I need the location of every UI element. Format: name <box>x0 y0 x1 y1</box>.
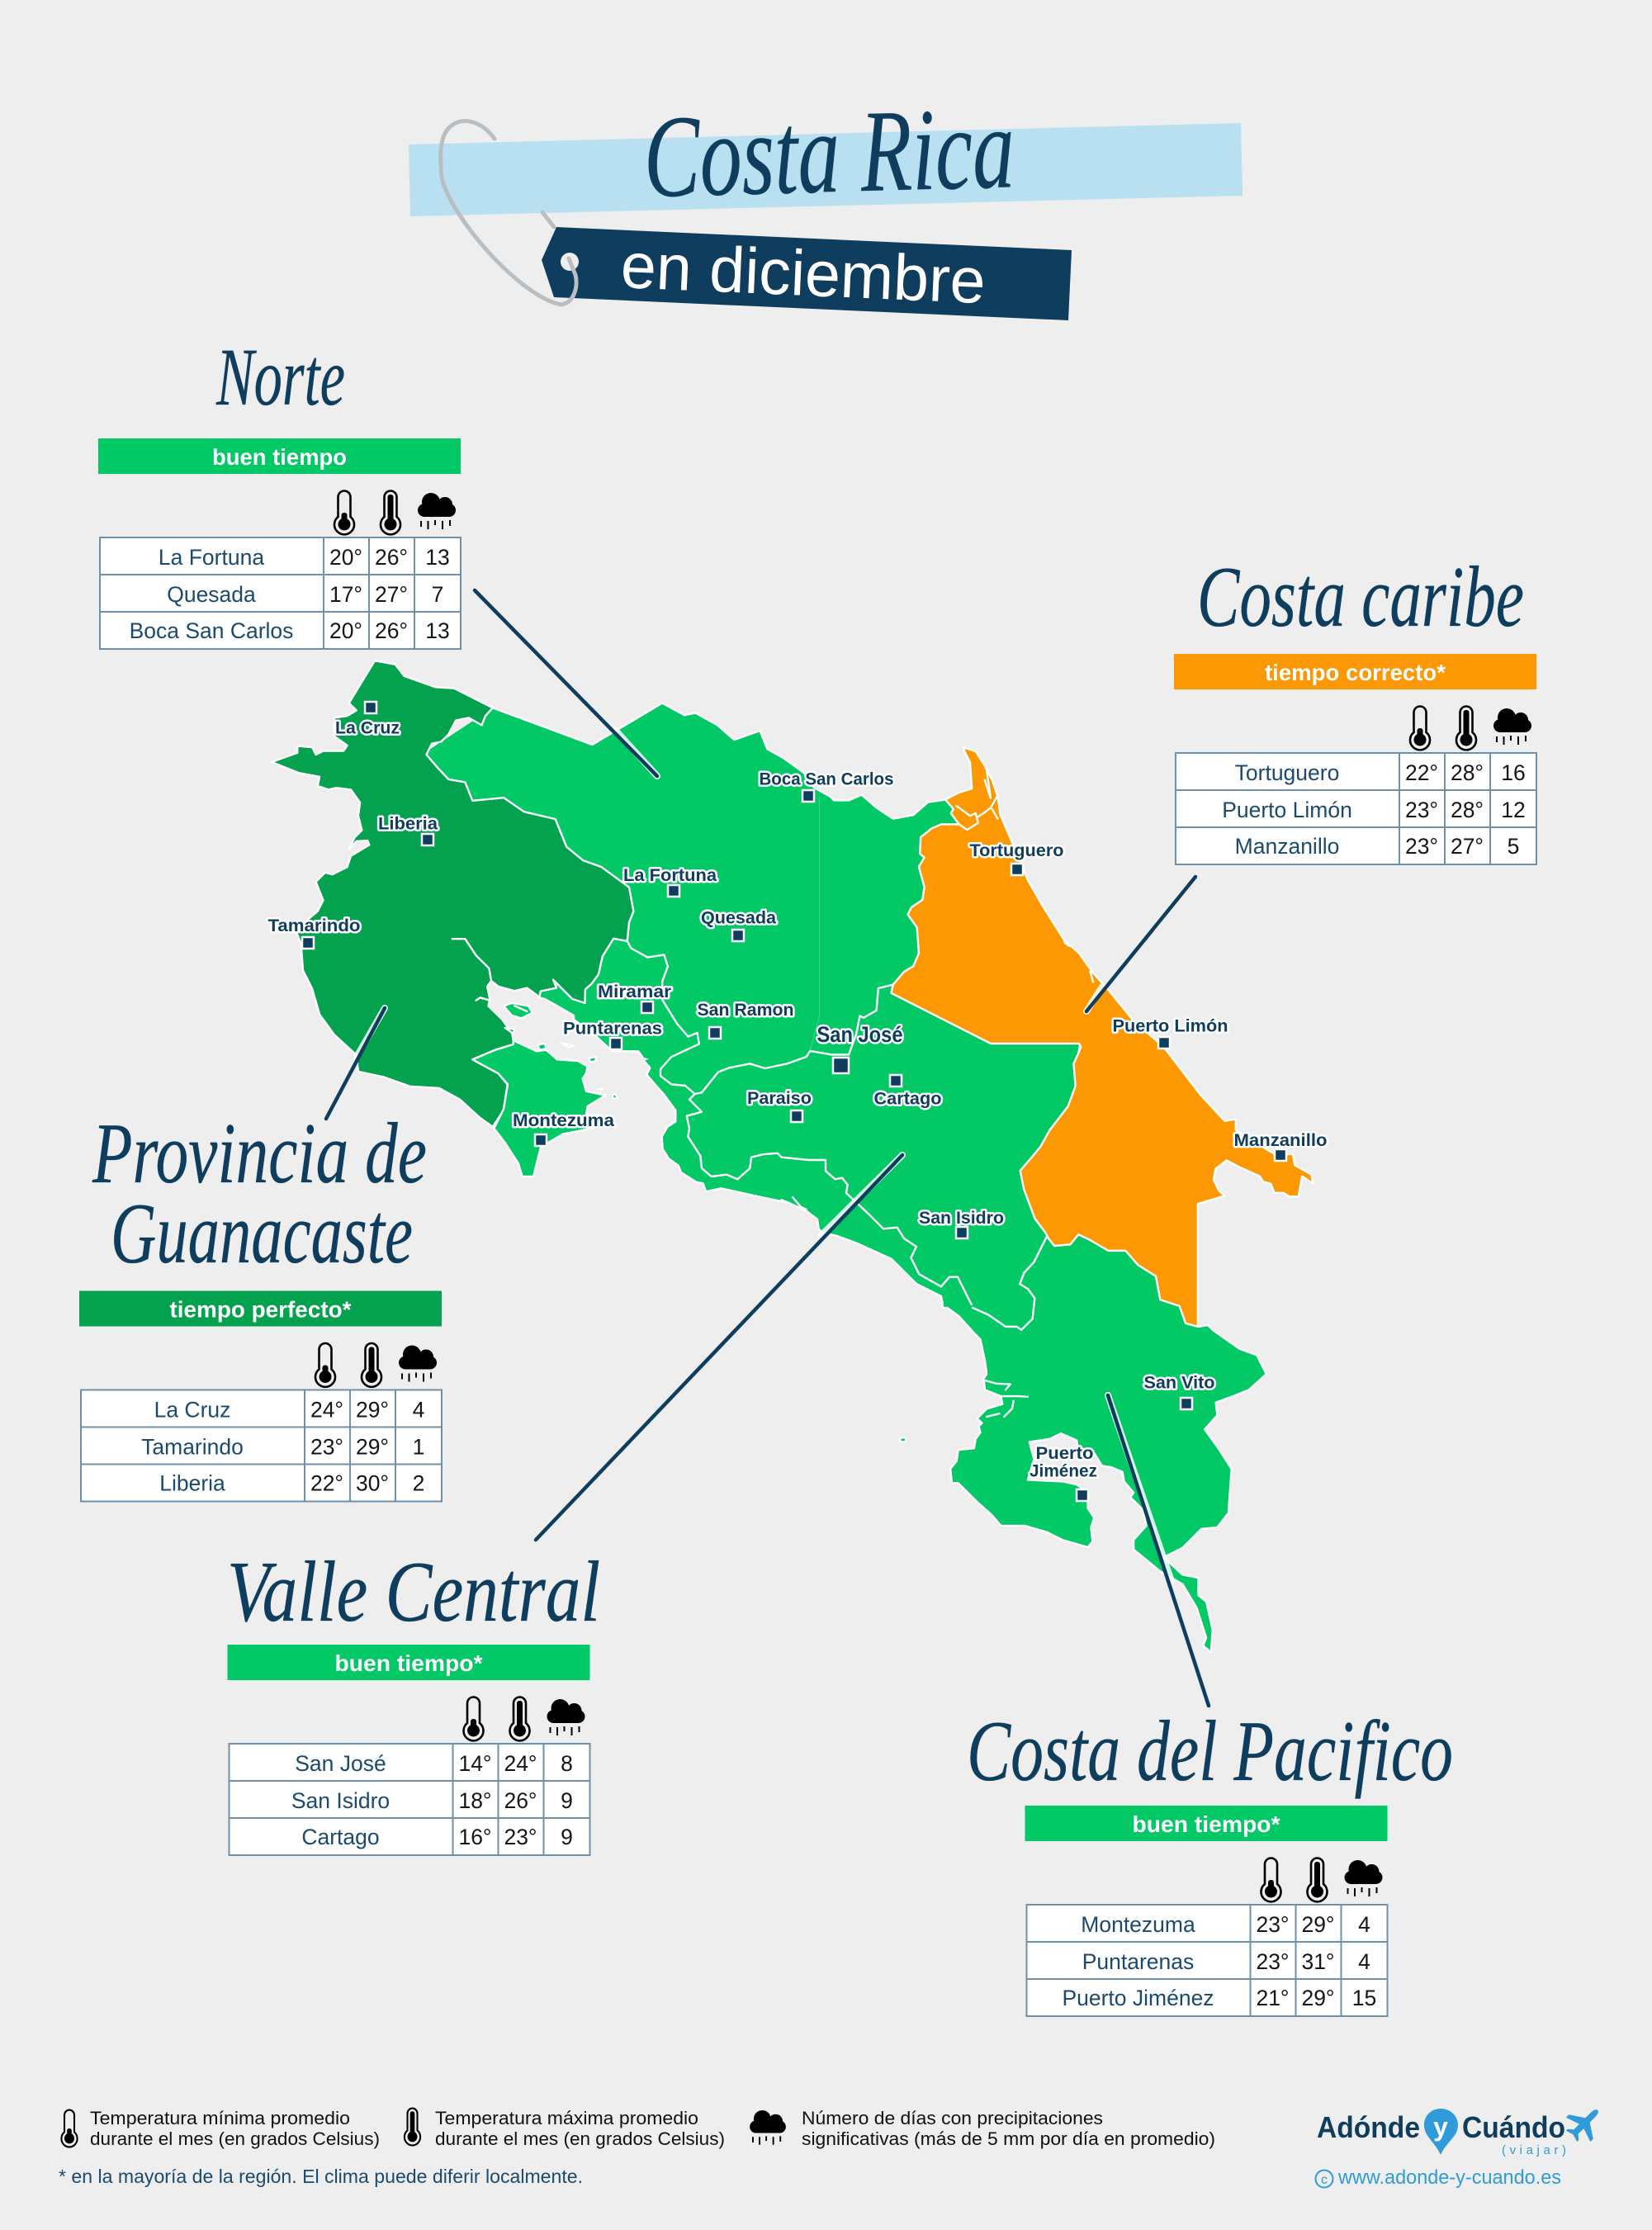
table: 26° <box>375 545 408 570</box>
website: www.adonde-y-cuando.es <box>1337 2166 1561 2189</box>
legend: rain text <box>802 2108 1215 2149</box>
heading: Valle Central: Valle Central <box>227 1543 600 1640</box>
labels: San José <box>817 1022 903 1047</box>
legend: minimum temperature text: durante el mes (en grados Celsius) <box>90 2128 380 2149</box>
title: Costa Rica: Costa Rica <box>642 82 1016 222</box>
heading: Provincia de Guanacaste: Guanacaste <box>111 1185 413 1281</box>
region: Nicoya tip and gulf islands <box>472 997 618 1177</box>
panel body: Valle Central <box>228 1645 589 1855</box>
region: green land silhouette <box>424 703 1266 1652</box>
table: 4 <box>413 1397 424 1422</box>
callout lines <box>326 590 1209 1706</box>
legend <box>59 2108 1215 2187</box>
heading: Norte: Norte <box>215 331 345 423</box>
logo: Adónde y Cuándo <box>1316 2098 1610 2189</box>
labels: Cartago <box>873 1088 941 1108</box>
table: 9 <box>561 1825 573 1849</box>
legend: rain text: Número de días con precipitaciones <box>802 2108 1103 2128</box>
table: 4 <box>1358 1949 1370 1974</box>
table: 28° <box>1451 760 1484 785</box>
table: 16° <box>458 1825 492 1849</box>
logo word: Cuándo: Cuándo <box>1462 2110 1565 2144</box>
logo word: Adónde: Adónde <box>1317 2110 1420 2144</box>
legend: minimum temperature text <box>90 2108 380 2149</box>
table: Cartago <box>301 1825 380 1849</box>
table: 23° <box>1256 1949 1290 1974</box>
banner: tiempo correcto: tiempo correcto* <box>1265 660 1446 685</box>
labels <box>267 718 1328 1481</box>
labels: San Ramon <box>697 1000 794 1020</box>
labels: Manzanillo <box>1233 1130 1328 1150</box>
table: Puerto Jiménez <box>1062 1986 1214 2010</box>
labels: Jiménez <box>1030 1461 1097 1481</box>
table: 9 <box>561 1788 573 1813</box>
table: 22° <box>310 1471 343 1496</box>
labels: Liberia <box>378 814 438 834</box>
legend: maximum temperature text: durante el mes (en grados Celsius) <box>435 2128 725 2149</box>
table: 26° <box>375 618 408 643</box>
banner: buen tiempo: buen tiempo* <box>335 1650 483 1676</box>
table: La Cruz <box>154 1397 230 1422</box>
icon: plane <box>1560 2098 1610 2148</box>
map of Costa Rica <box>272 660 1314 1652</box>
legend: rain text: significativas (más de 5 mm por día en promedio) <box>802 2128 1215 2149</box>
labels: Montezuma <box>513 1110 615 1130</box>
table: Manzanillo <box>1235 834 1339 859</box>
labels: La Cruz <box>335 718 400 738</box>
banner: buen tiempo <box>98 438 461 474</box>
table: 30° <box>356 1471 389 1496</box>
labels: Tamarindo <box>267 916 360 935</box>
labels: Quesada <box>701 908 777 928</box>
labels: Puerto Limón <box>1113 1016 1228 1035</box>
labels: Puerto <box>1035 1443 1093 1463</box>
banner: buen tiempo: buen tiempo* <box>1133 1811 1280 1837</box>
legend: maximum temperature icon <box>405 2109 420 2146</box>
banner: buen tiempo <box>228 1645 589 1680</box>
table: 27° <box>1451 834 1484 859</box>
banner: tiempo perfecto <box>79 1291 442 1326</box>
table: 23° <box>1256 1912 1290 1937</box>
table: 14° <box>458 1751 492 1776</box>
labels: La Fortuna <box>623 865 717 885</box>
table: 5 <box>1508 834 1519 859</box>
table: Montezuma <box>1081 1912 1195 1937</box>
labels: Puntarenas <box>563 1019 662 1039</box>
panel body: Costa del Pacifico <box>1025 1806 1387 2016</box>
region: green coast and border lines <box>493 703 1266 1652</box>
legend: minimum temperature icon <box>61 2110 78 2147</box>
table: 22° <box>1405 760 1438 785</box>
heading: Provincia de Guanacaste <box>92 1105 427 1281</box>
heading: Provincia de Guanacaste: Provincia de <box>92 1105 427 1201</box>
table: Puerto Limón <box>1222 798 1352 822</box>
city markers and labels <box>267 702 1328 1501</box>
heading: Costa caribe: Costa caribe <box>1197 548 1524 645</box>
table: 29° <box>1301 1986 1335 2010</box>
banner: buen tiempo: buen tiempo <box>212 444 347 470</box>
table: 21° <box>1256 1986 1290 2010</box>
table: Quesada <box>167 582 256 607</box>
table: 8 <box>561 1751 573 1776</box>
banner: buen tiempo <box>1025 1806 1387 1841</box>
table: 24° <box>310 1397 343 1422</box>
table <box>230 1744 589 1855</box>
table: 13 <box>425 545 450 570</box>
table <box>1176 753 1536 864</box>
table: 1 <box>413 1435 424 1460</box>
table: 27° <box>375 582 408 607</box>
table: 7 <box>432 582 443 607</box>
weather icons <box>334 490 456 534</box>
table: 29° <box>356 1435 389 1460</box>
table: 23° <box>1405 834 1438 859</box>
table: San José <box>295 1751 386 1776</box>
table: La Fortuna <box>159 545 264 570</box>
table: 26° <box>504 1788 537 1813</box>
table: San Isidro <box>291 1788 390 1813</box>
panel: Valle Central <box>227 1543 600 1855</box>
table: 13 <box>425 618 450 643</box>
markers <box>302 702 1286 1501</box>
line: Guanacaste <box>326 1008 385 1119</box>
legend: maximum temperature text <box>435 2108 725 2149</box>
table: 31° <box>1301 1949 1335 1974</box>
weather icons <box>464 1697 585 1740</box>
copyright mark: c <box>1321 2173 1328 2187</box>
labels: San Isidro <box>919 1208 1004 1228</box>
weather icons <box>1261 1858 1382 1901</box>
icon: location pin <box>1424 2109 1458 2155</box>
line: Valle Central <box>536 1155 902 1540</box>
table <box>100 537 461 649</box>
table: Liberia <box>159 1471 225 1496</box>
table: 23° <box>504 1825 537 1849</box>
table: 16 <box>1501 760 1526 785</box>
table: 23° <box>310 1435 343 1460</box>
heading: Costa del Pacifico: Costa del Pacifico <box>967 1702 1453 1799</box>
tag string <box>441 121 576 305</box>
line halos over the map <box>357 731 1172 1581</box>
labels: Miramar <box>598 982 672 1001</box>
icon: location pin: y <box>1433 2112 1448 2142</box>
weather icons <box>315 1343 437 1387</box>
table <box>81 1390 442 1501</box>
panel body: Guanacaste <box>79 1291 442 1501</box>
table <box>1027 1905 1387 2016</box>
table: Puntarenas <box>1082 1949 1194 1974</box>
footnote: * en la mayoría de la región. El clima puede diferir localmente. <box>59 2166 583 2187</box>
region: Guanacaste dark green <box>272 660 633 1127</box>
table: Tamarindo <box>141 1435 244 1460</box>
table: 4 <box>1358 1912 1370 1937</box>
legend: rain icon <box>750 2110 786 2145</box>
copyright mark <box>1316 2170 1332 2188</box>
table: 12 <box>1501 798 1526 822</box>
subtitle tag <box>542 227 1072 320</box>
labels: San Vito <box>1144 1372 1215 1392</box>
legend: minimum temperature text: Temperatura mínima promedio <box>90 2108 350 2128</box>
labels: Paraiso <box>747 1088 812 1108</box>
table: 2 <box>413 1471 424 1496</box>
table: 23° <box>1405 798 1438 822</box>
table: 15 <box>1352 1986 1376 2010</box>
table: 20° <box>329 618 362 643</box>
labels: Tortuguero <box>969 840 1063 860</box>
panel body: Costa caribe <box>1174 654 1536 864</box>
panel: Provincia de Guanacaste <box>79 1105 442 1501</box>
panel: Norte <box>98 331 461 649</box>
table: 18° <box>458 1788 492 1813</box>
table: 29° <box>1301 1912 1335 1937</box>
weather icons <box>1410 707 1531 750</box>
legend: maximum temperature text: Temperatura máxima promedio <box>435 2108 698 2128</box>
table: 20° <box>329 545 362 570</box>
line: Costa del Pacifico <box>1108 1395 1209 1706</box>
title band <box>409 123 1243 216</box>
region: Costa caribe orange <box>891 747 1314 1327</box>
banner: tiempo correcto <box>1174 654 1536 689</box>
table: 29° <box>356 1397 389 1422</box>
logo tagline: (viajar) <box>1502 2143 1566 2157</box>
line: Norte <box>475 590 657 776</box>
panel: Costa caribe <box>1174 548 1536 864</box>
banner: tiempo perfecto: tiempo perfecto* <box>170 1296 352 1323</box>
table: 24° <box>504 1751 537 1776</box>
labels: Boca San Carlos <box>760 769 894 789</box>
subtitle: en diciembre: en diciembre <box>619 229 987 317</box>
title block <box>409 82 1243 320</box>
table: 28° <box>1451 798 1484 822</box>
panel: Costa del Pacifico <box>967 1702 1453 2016</box>
table: Tortuguero <box>1235 760 1339 785</box>
table: Boca San Carlos <box>130 618 293 643</box>
table: 17° <box>329 582 362 607</box>
line: Costa caribe <box>1086 877 1195 1011</box>
